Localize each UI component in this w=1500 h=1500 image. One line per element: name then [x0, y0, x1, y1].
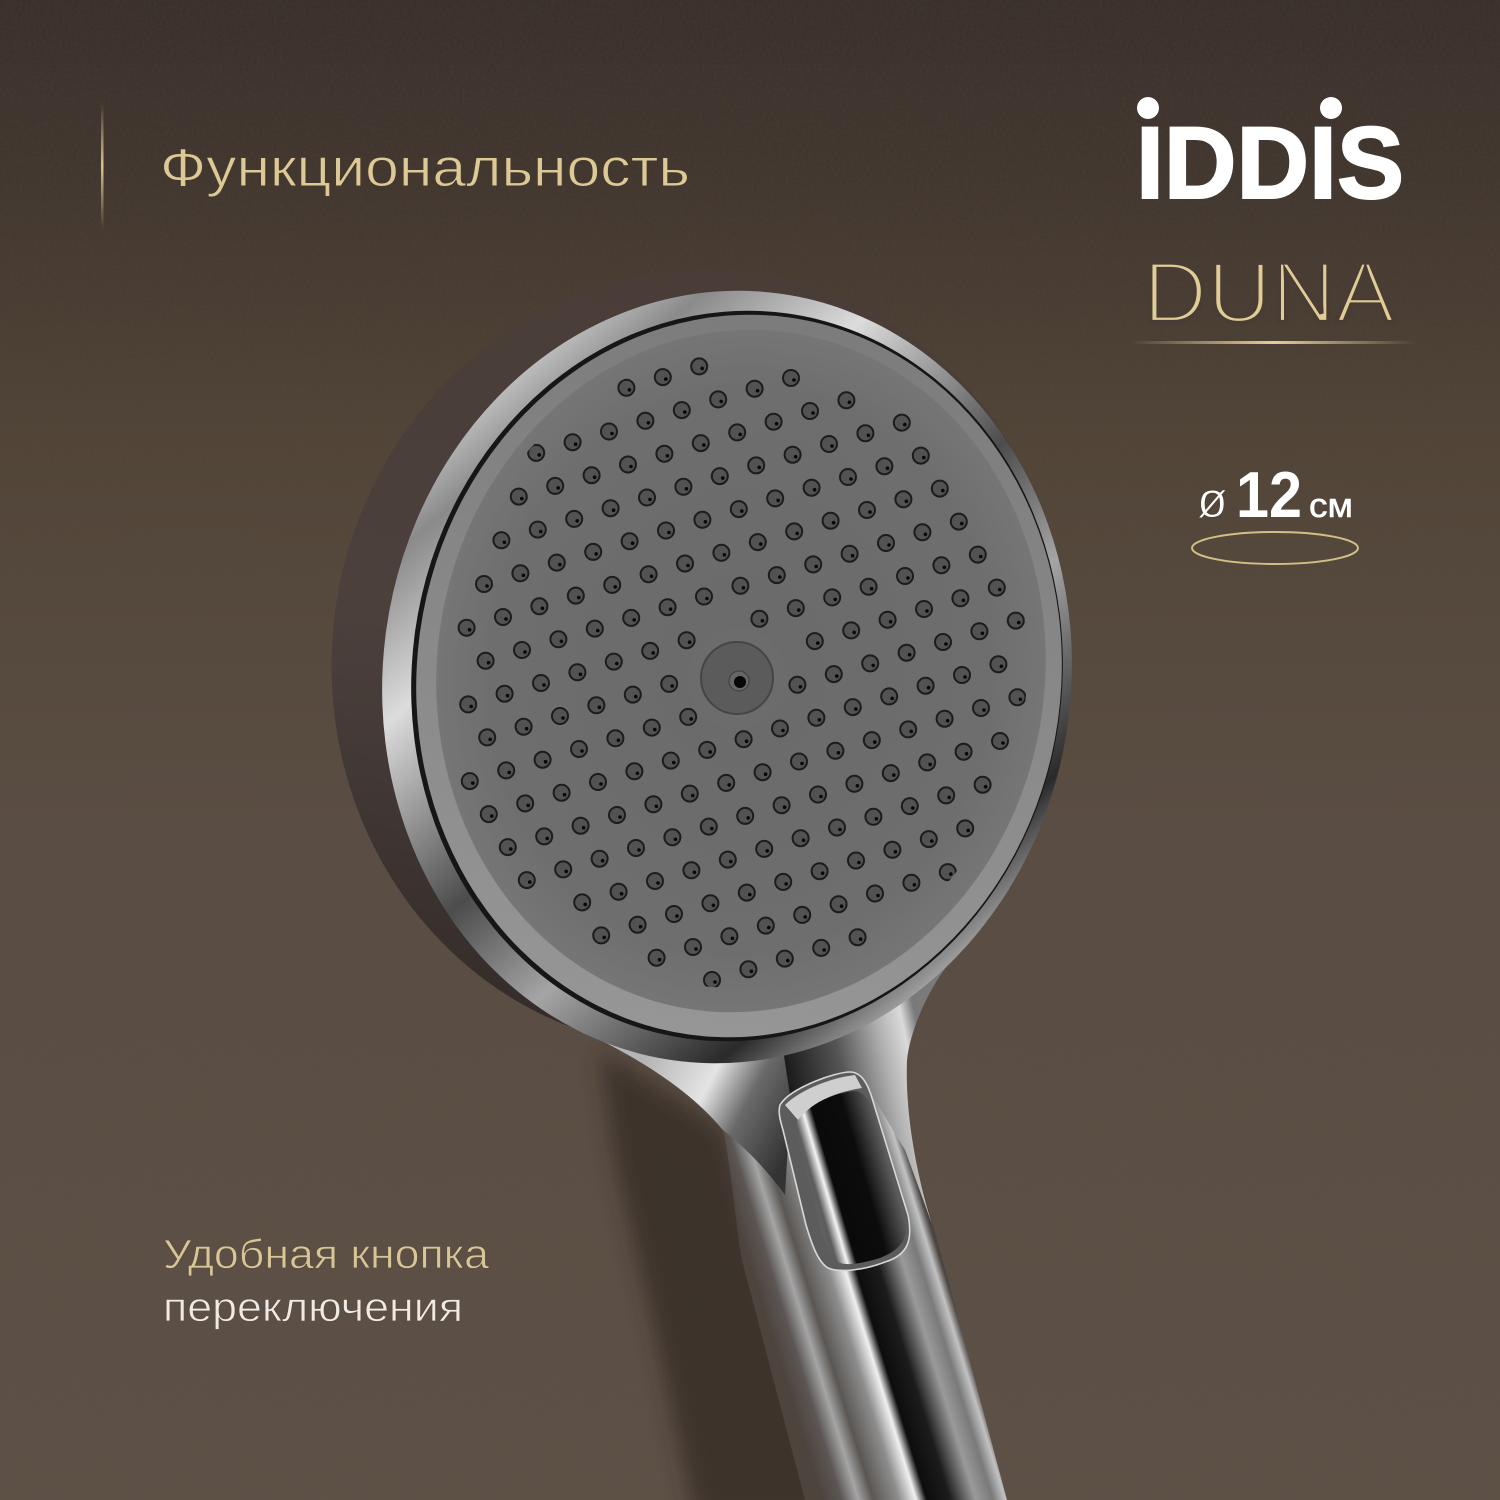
- diameter label: см: [1309, 487, 1353, 525]
- diameter label: [1197, 458, 1353, 531]
- diameter label: ø: [1197, 472, 1228, 528]
- diameter label: 12: [1236, 458, 1302, 531]
- back shell: [281, 223, 1119, 1097]
- handle neck left: [600, 1020, 830, 1195]
- caption: переключения: [163, 1284, 463, 1330]
- caption: Удобная кнопка: [163, 1231, 489, 1277]
- shadow of handle: [600, 1050, 840, 1500]
- caption: [163, 1231, 489, 1330]
- heading: Функциональность: [160, 138, 690, 198]
- brand logo: IDDIS: [1136, 106, 1404, 220]
- name underline: [1130, 341, 1416, 344]
- nozzle face: [392, 290, 1090, 1052]
- rim groove: [364, 268, 1110, 1084]
- chrome rim: [332, 246, 1122, 1108]
- handle: [600, 1030, 1007, 1500]
- product name: DUNA: [1143, 245, 1396, 341]
- switch button: [779, 1072, 910, 1270]
- accent line: [101, 103, 104, 229]
- handle neck right: [780, 950, 952, 1224]
- shower head: [332, 290, 1072, 1500]
- spray nozzles: [458, 357, 1026, 988]
- outer face band: [370, 273, 1108, 1079]
- icon: diameter ellipse: [1192, 532, 1358, 564]
- central nozzle: [687, 628, 787, 728]
